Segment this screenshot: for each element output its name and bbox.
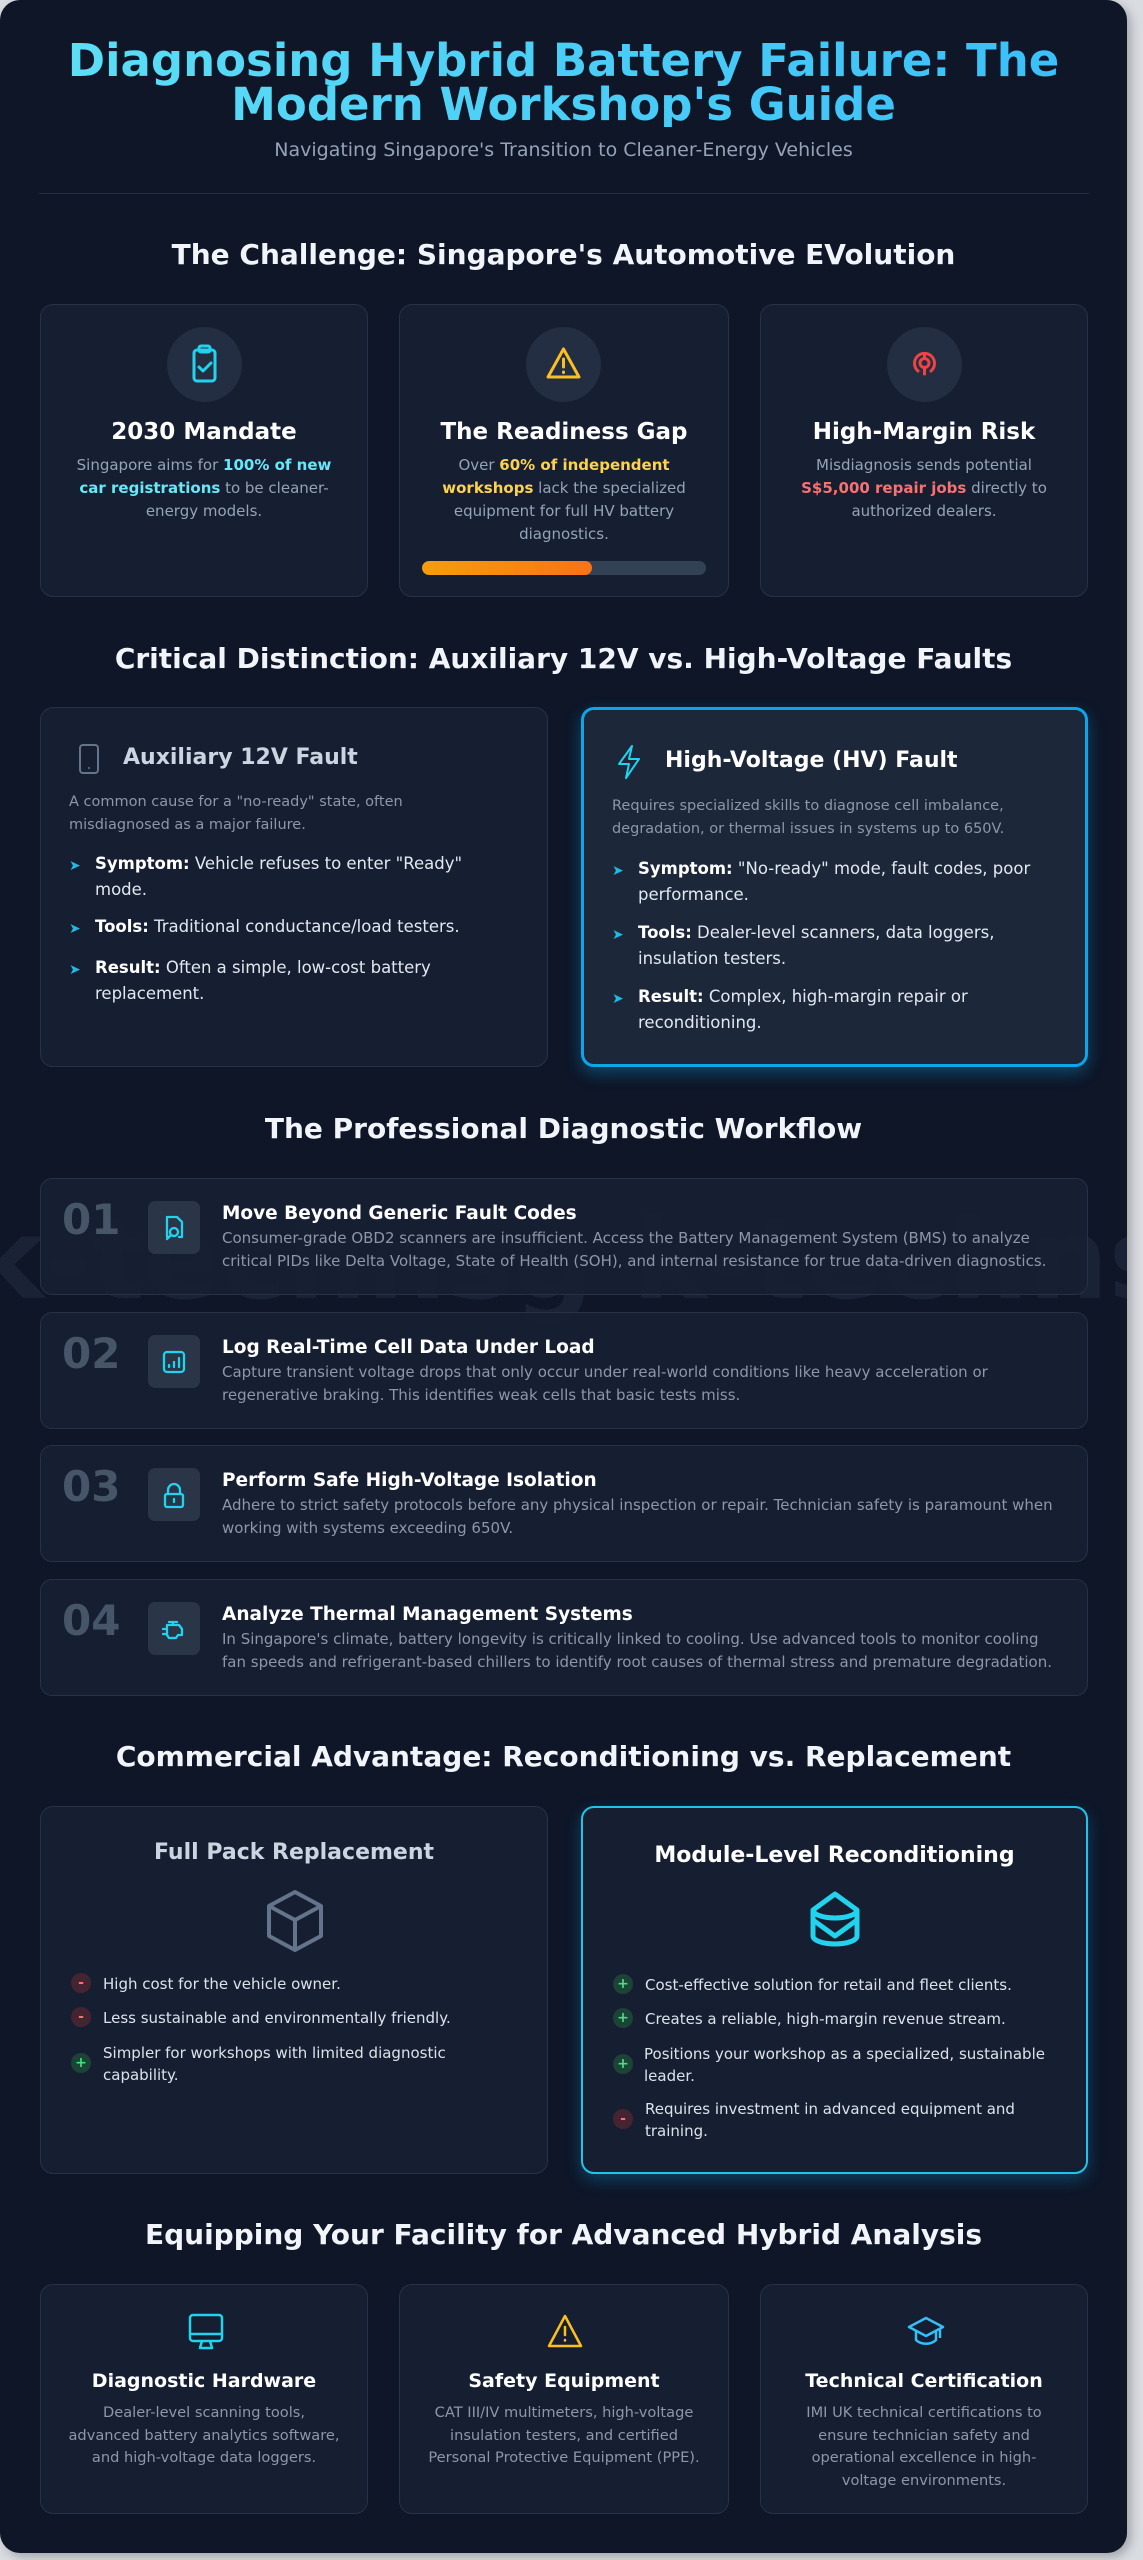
panel: full pack replacement: Less sustainable and environmentally friendly. — [103, 2009, 451, 2027]
panel: full pack replacement: Full Pack Replacement — [154, 1840, 434, 1865]
panel: readiness gap: Over 60% of independent — [458, 456, 670, 474]
panel: module-level reconditioning: Cost-effective solution for retail and fleet clients. — [645, 1976, 1012, 1994]
panel: high-voltage fault: Symptom: "No-ready" mode, fault codes, poor — [638, 859, 1030, 878]
panel: high-voltage fault: reconditioning. — [638, 1013, 762, 1032]
panel: module-level reconditioning: training. — [645, 2122, 708, 2140]
step 04: In Singapore's climate, battery longevity is critically linked to cooling. Use advanced tools to monitor cooling — [222, 1630, 1039, 1648]
panel: high-voltage fault: ➤ — [612, 863, 624, 879]
icon: engine — [148, 1602, 200, 1655]
panel: full pack replacement: + — [75, 2055, 87, 2071]
panel: technical certification: Technical Certification — [805, 2370, 1043, 2392]
icon: lightning — [618, 745, 640, 779]
panel: high-voltage fault: Tools: Dealer-level scanners, data loggers, — [638, 923, 994, 942]
panel: module-level reconditioning: + — [617, 2056, 629, 2072]
panel: high-margin risk: authorized dealers. — [851, 502, 997, 520]
panel: module-level reconditioning: Creates a reliable, high-margin revenue stream. — [645, 2010, 1006, 2028]
panel: auxiliary 12V — [40, 707, 548, 1067]
panel: auxiliary 12V: ➤ — [69, 858, 81, 874]
progress bar 60% — [422, 561, 706, 575]
title — [0, 39, 1127, 127]
step 02: Capture transient voltage drops that only occur under real-world conditions like heavy acceleration or — [222, 1363, 988, 1381]
panel: module-level reconditioning: - — [620, 2111, 626, 2127]
panel: high-voltage fault: degradation, or thermal issues in systems up to 650V. — [612, 821, 1004, 837]
panel: 2030 mandate: Singapore aims for 100% of new — [77, 456, 331, 474]
panel: technical certification: IMI UK technical certifications to — [806, 2404, 1042, 2421]
panel: safety equipment: Safety Equipment — [468, 2370, 660, 2392]
panel: auxiliary 12V: ➤ — [69, 962, 81, 978]
step 01: critical PIDs like Delta Voltage, State of Health (SOH), and internal resistance for true data-driven diagnostics. — [222, 1252, 1046, 1270]
panel: high-voltage fault: Result: Complex, high-margin repair or — [638, 987, 968, 1006]
panel: auxiliary 12V: Result: Often a simple, low-cost battery — [95, 958, 431, 977]
panel: module-level reconditioning: Requires investment in advanced equipment and — [645, 2100, 1015, 2118]
panel: readiness gap — [399, 304, 729, 597]
icon: monitor — [188, 2314, 224, 2350]
icon: warning — [548, 2314, 582, 2348]
step 04 — [40, 1579, 1088, 1696]
step 02: 02 — [62, 1329, 120, 1378]
panel: high-margin risk — [760, 304, 1088, 597]
panel: safety equipment: CAT III/IV multimeters, high-voltage — [435, 2404, 693, 2421]
icon: dollar — [887, 327, 962, 402]
step 04: fan speeds and refrigerant-based chillers to identify root causes of thermal stress and premature degradation. — [222, 1653, 1052, 1671]
panel: diagnostic hardware: advanced battery analytics software, — [68, 2427, 340, 2444]
heading: equipping: Equipping Your Facility for Advanced Hybrid Analysis — [145, 2218, 982, 2251]
step 01: Move Beyond Generic Fault Codes — [222, 1203, 577, 1224]
step 04: Analyze Thermal Management Systems — [222, 1604, 633, 1625]
panel: full pack replacement: Simpler for workshops with limited diagnostic — [103, 2044, 446, 2062]
subtitle: Navigating Singapore's Transition to Cleaner-Energy Vehicles — [274, 139, 853, 161]
panel: technical certification: ensure technician safety and — [818, 2427, 1030, 2444]
panel: readiness gap: The Readiness Gap — [440, 419, 688, 445]
panel: high-voltage fault: performance. — [638, 885, 749, 904]
panel: high-voltage fault: ➤ — [612, 927, 624, 943]
heading: challenge: The Challenge: Singapore's Automotive EVolution — [172, 238, 955, 271]
panel: safety equipment — [399, 2284, 729, 2514]
panel: high-margin risk: S$5,000 repair jobs directly to — [801, 479, 1047, 497]
icon: warning — [526, 327, 601, 402]
panel: module-level reconditioning: + — [617, 1976, 629, 1992]
icon: lock — [148, 1468, 200, 1521]
title: Diagnosing Hybrid Battery Failure: The — [68, 34, 1059, 87]
panel: diagnostic hardware: Diagnostic Hardware — [92, 2370, 316, 2392]
panel: 2030 mandate — [40, 304, 368, 597]
icon: box — [267, 1890, 323, 1952]
panel: readiness gap: diagnostics. — [519, 525, 609, 543]
step 02 — [40, 1312, 1088, 1429]
icon: graduation cap — [908, 2316, 944, 2345]
icon: clipboard — [167, 327, 242, 402]
panel: diagnostic hardware — [40, 2284, 368, 2514]
panel: safety equipment: Personal Protective Equipment (PPE). — [428, 2449, 700, 2466]
panel: safety equipment: insulation testers, and certified — [450, 2427, 678, 2444]
panel: readiness gap: workshops lack the specialized — [442, 479, 686, 497]
panel: full pack replacement: High cost for the vehicle owner. — [103, 1975, 341, 1993]
panel: auxiliary 12V: A common cause for a "no-ready" state, often — [69, 794, 403, 810]
icon: layers — [810, 1892, 860, 1946]
step 03: Perform Safe High-Voltage Isolation — [222, 1470, 597, 1491]
step 01: 01 — [62, 1195, 120, 1244]
panel: module-level reconditioning: Positions your workshop as a specialized, sustainable — [644, 2045, 1045, 2063]
step 02: regenerative braking. This identifies weak cells that basic tests miss. — [222, 1386, 740, 1404]
panel: module-level reconditioning: Module-Level Reconditioning — [654, 1843, 1015, 1868]
step 03: Adhere to strict safety protocols before any physical inspection or repair. Technician safety is paramount when — [222, 1496, 1053, 1514]
panel: high-voltage fault: insulation testers. — [638, 949, 786, 968]
panel: high-voltage fault — [581, 707, 1088, 1067]
step 01 — [40, 1178, 1088, 1295]
panel: high-voltage fault: ➤ — [612, 991, 624, 1007]
heading: workflow: The Professional Diagnostic Workflow — [265, 1112, 862, 1145]
panel: high-margin risk: Misdiagnosis sends potential — [816, 456, 1032, 474]
panel: module-level reconditioning: + — [617, 2010, 629, 2026]
panel: high-margin risk: High-Margin Risk — [813, 419, 1035, 445]
panel: module-level reconditioning — [581, 1806, 1088, 2174]
panel: high-voltage fault: Requires specialized skills to diagnose cell imbalance, — [612, 798, 1004, 814]
step 03: working with systems exceeding 650V. — [222, 1519, 513, 1537]
panel: auxiliary 12V: misdiagnosed as a major failure. — [69, 817, 306, 833]
icon: phone — [79, 744, 99, 774]
heading: critical distinction: Critical Distinction: Auxiliary 12V vs. High-Voltage Faults — [115, 642, 1012, 675]
panel: full pack replacement — [40, 1806, 548, 2174]
panel: auxiliary 12V: Auxiliary 12V Fault — [123, 745, 358, 770]
panel: auxiliary 12V: ➤ — [69, 921, 81, 937]
panel: diagnostic hardware: Dealer-level scanning tools, — [103, 2404, 305, 2421]
panel: auxiliary 12V: Tools: Traditional conductance/load testers. — [95, 917, 460, 936]
step 03: 03 — [62, 1462, 120, 1511]
panel: 2030 mandate: energy models. — [146, 502, 262, 520]
icon: file search — [148, 1201, 200, 1254]
panel: full pack replacement: - — [78, 2009, 84, 2025]
panel: module-level reconditioning: leader. — [644, 2067, 695, 2085]
panel: technical certification: operational excellence in high- — [812, 2449, 1036, 2466]
panel: readiness gap: equipment for full HV battery — [454, 502, 674, 520]
panel: auxiliary 12V: replacement. — [95, 984, 204, 1003]
panel: high-voltage fault: High-Voltage (HV) Fault — [665, 748, 958, 773]
panel: 2030 mandate: 2030 Mandate — [111, 419, 297, 445]
panel: diagnostic hardware: and high-voltage data loggers. — [92, 2449, 316, 2466]
step 04: 04 — [62, 1596, 120, 1645]
panel: technical certification: voltage environments. — [842, 2472, 1006, 2489]
panel: full pack replacement: - — [78, 1975, 84, 1991]
panel: auxiliary 12V: mode. — [95, 880, 147, 899]
step 02: Log Real-Time Cell Data Under Load — [222, 1337, 595, 1358]
icon: chart — [148, 1335, 200, 1388]
title: Modern Workshop's Guide — [231, 78, 896, 131]
panel: auxiliary 12V: Symptom: Vehicle refuses to enter "Ready" — [95, 854, 462, 873]
panel: full pack replacement: capability. — [103, 2066, 179, 2084]
panel: technical certification — [760, 2284, 1088, 2514]
panel: 2030 mandate: car registrations to be cleaner- — [79, 479, 329, 497]
step 03 — [40, 1445, 1088, 1562]
heading: commercial advantage: Commercial Advantage: Reconditioning vs. Replacement — [116, 1740, 1011, 1773]
step 01: Consumer-grade OBD2 scanners are insufficient. Access the Battery Management System (BMS) to analyze — [222, 1229, 1030, 1247]
